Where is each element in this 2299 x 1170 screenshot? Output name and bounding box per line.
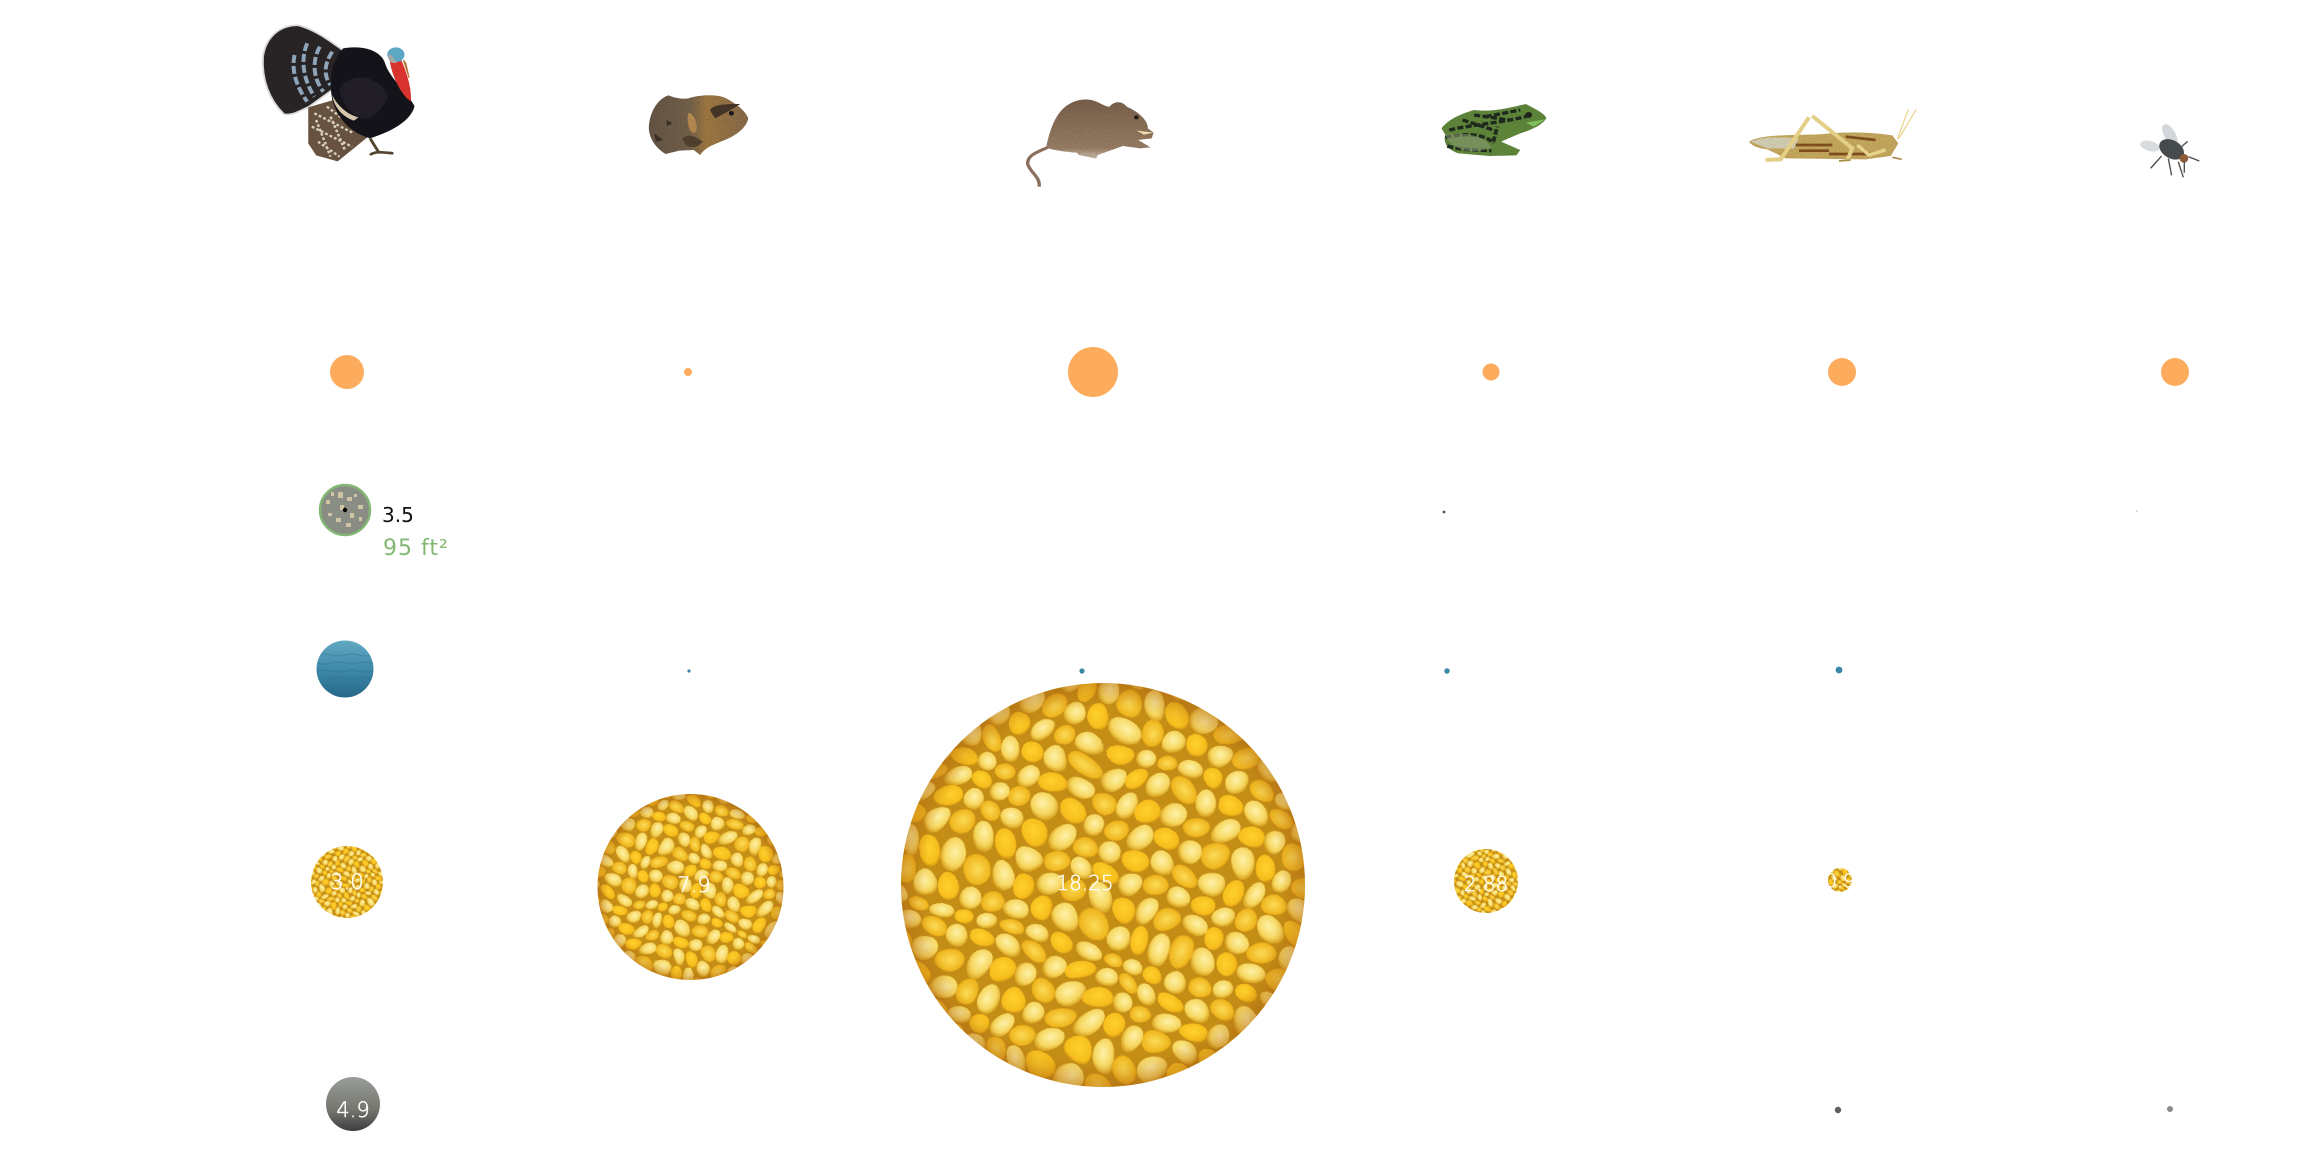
row: small water dots xyxy=(687,667,1842,674)
corn circle: grasshopper 0.9: 0.9 xyxy=(1825,870,1855,892)
corn circle: mouse 18.25: 18.25 xyxy=(1056,871,1114,895)
image: fly xyxy=(2139,122,2199,177)
image: turkey xyxy=(263,25,415,161)
image: grasshopper xyxy=(1749,109,1916,161)
image: guinea pig xyxy=(649,95,748,155)
corn circle: mouse 18.25 xyxy=(901,683,1305,1087)
grey circle: turkey 4.9 xyxy=(326,1077,380,1131)
farm dot: frog xyxy=(1443,511,1445,513)
farm circle: turkey xyxy=(320,485,370,535)
corn circle: guinea pig 7.9 xyxy=(598,794,784,980)
image: mouse xyxy=(1028,99,1154,187)
corn circle: turkey 3.0: 3.0 xyxy=(330,870,364,894)
infographic canvas xyxy=(262,24,2200,1131)
label: 95 square feet: 95 ft² xyxy=(383,536,449,561)
corn circle: turkey 3.0 xyxy=(311,846,383,918)
corn circle: guinea pig 7.9: 7.9 xyxy=(677,873,711,897)
farm dot: fly xyxy=(2136,510,2138,512)
row: orange circles xyxy=(330,347,2189,397)
grey circle: turkey 4.9: 4.9 xyxy=(336,1098,370,1122)
label: 3.5: 3.5 xyxy=(382,503,414,527)
corn circle: frog 2.88 xyxy=(1454,849,1518,913)
image: frog xyxy=(1442,104,1546,156)
grey dot: fly xyxy=(2167,1106,2173,1112)
grey dot: grasshopper xyxy=(1835,1107,1841,1113)
water circle: turkey xyxy=(316,640,374,698)
corn circle: frog 2.88: 2.88 xyxy=(1464,872,1508,896)
